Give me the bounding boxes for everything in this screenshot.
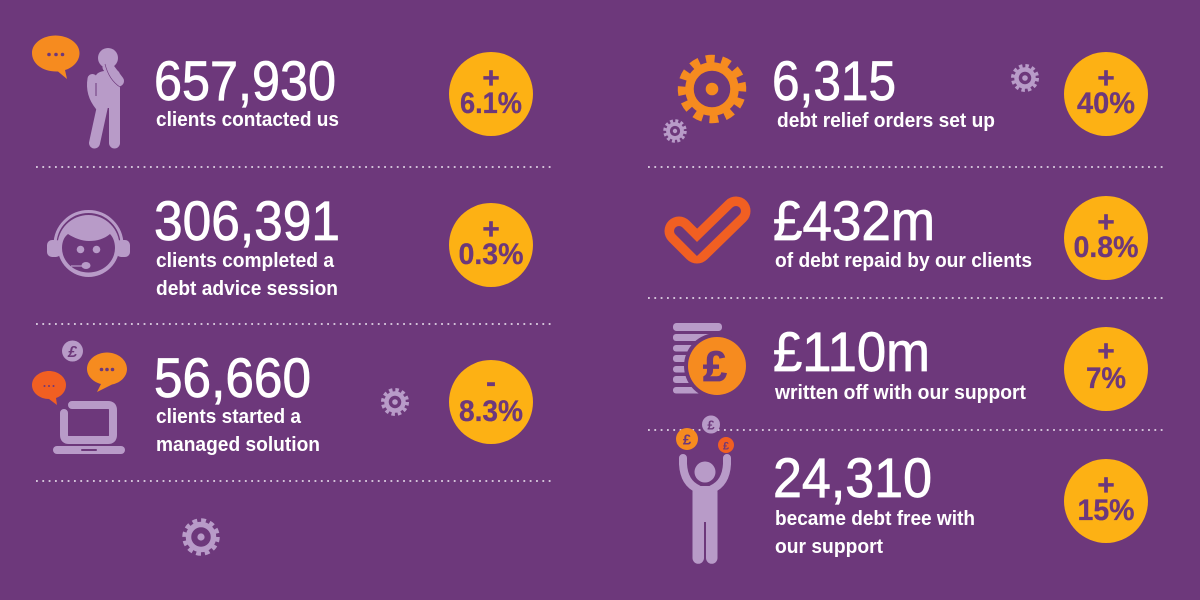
badge: plus 0.8%: 0.8% [1074,231,1138,264]
stat: clients completed a debt advice session: clients completed a [156,249,335,272]
stat: became debt free with our support: our support [775,535,883,558]
stat: clients started a managed solution: 56,660 [154,346,311,409]
icon: person juggling coins: £ [723,440,729,452]
icon: coin stack with pound coin: £ [703,343,727,391]
stat: became debt free with our support: became debt free with [775,507,975,530]
stat: became debt free with our support [773,446,975,558]
stat: clients completed a debt advice session: 306,391 [154,189,340,252]
badge: plus 0.3%: + [482,213,500,246]
stat: of debt repaid by our clients: £432m [773,189,935,252]
badge: plus 6.1% [449,52,533,136]
icon: small gear top right [1013,66,1037,90]
stat: of debt repaid by our clients [773,189,1032,272]
badge: plus 7%: 7% [1086,362,1126,395]
badge: plus 7% [1064,327,1148,411]
stat: clients started a managed solution: clients started a [156,405,302,428]
badge: plus 0.8%: + [1097,206,1115,239]
icon: laptop with speech bubbles and pound coin [32,340,127,454]
stat: clients started a managed solution: managed solution [156,433,320,456]
icon: decorative gear bottom [184,520,218,554]
icon: person juggling coins: £ [707,418,715,432]
icon: large orange gear with small gear [665,53,748,141]
stat: debt relief orders set up [772,49,995,132]
stat: clients contacted us: 657,930 [154,49,336,112]
stat: clients completed a debt advice session [154,189,340,300]
badge: plus 0.3%: 0.3% [458,238,524,271]
icon: coin stack with pound coin [673,323,750,399]
icon: thinking person with speech bubble [32,36,120,143]
stat: became debt free with our support: 24,310 [773,446,932,509]
icon: check mark [679,211,736,249]
stat: debt relief orders set up: 6,315 [772,49,896,112]
badge: plus 6.1%: 6.1% [460,87,522,120]
badge: plus 15%: + [1097,469,1115,502]
icon: person juggling coins: £ [683,432,692,448]
stat: clients completed a debt advice session: debt advice session [156,277,338,300]
badge: plus 15%: 15% [1078,494,1134,527]
badge: plus 40%: 40% [1077,87,1135,120]
stat: written off with our support: written off with our support [774,381,1026,404]
badge: plus 40% [1064,52,1148,136]
icon: small gear [383,390,407,414]
stat: debt relief orders set up: debt relief orders set up [777,109,995,132]
stat: of debt repaid by our clients: of debt repaid by our clients [775,249,1032,272]
badge: plus 15% [1064,459,1148,543]
badge: minus 8.3%: 8.3% [459,395,523,428]
badge: plus 40%: + [1097,62,1115,95]
stat: clients started a managed solution [154,346,320,456]
icon: person juggling coins [676,416,734,564]
badge: minus 8.3% [449,360,533,444]
badge: minus 8.3%: - [486,366,496,399]
stat: written off with our support [773,320,1026,404]
icon: laptop with speech bubbles and pound coin: £ [67,344,78,361]
badge: plus 7%: + [1097,335,1115,368]
badge: plus 0.3% [449,203,533,287]
badge: plus 0.8% [1064,196,1148,280]
icon: headset advisor [47,212,130,277]
stat: written off with our support: £110m [773,320,930,383]
badge: plus 6.1%: + [482,62,500,95]
stat: clients contacted us: clients contacted us [156,108,339,131]
